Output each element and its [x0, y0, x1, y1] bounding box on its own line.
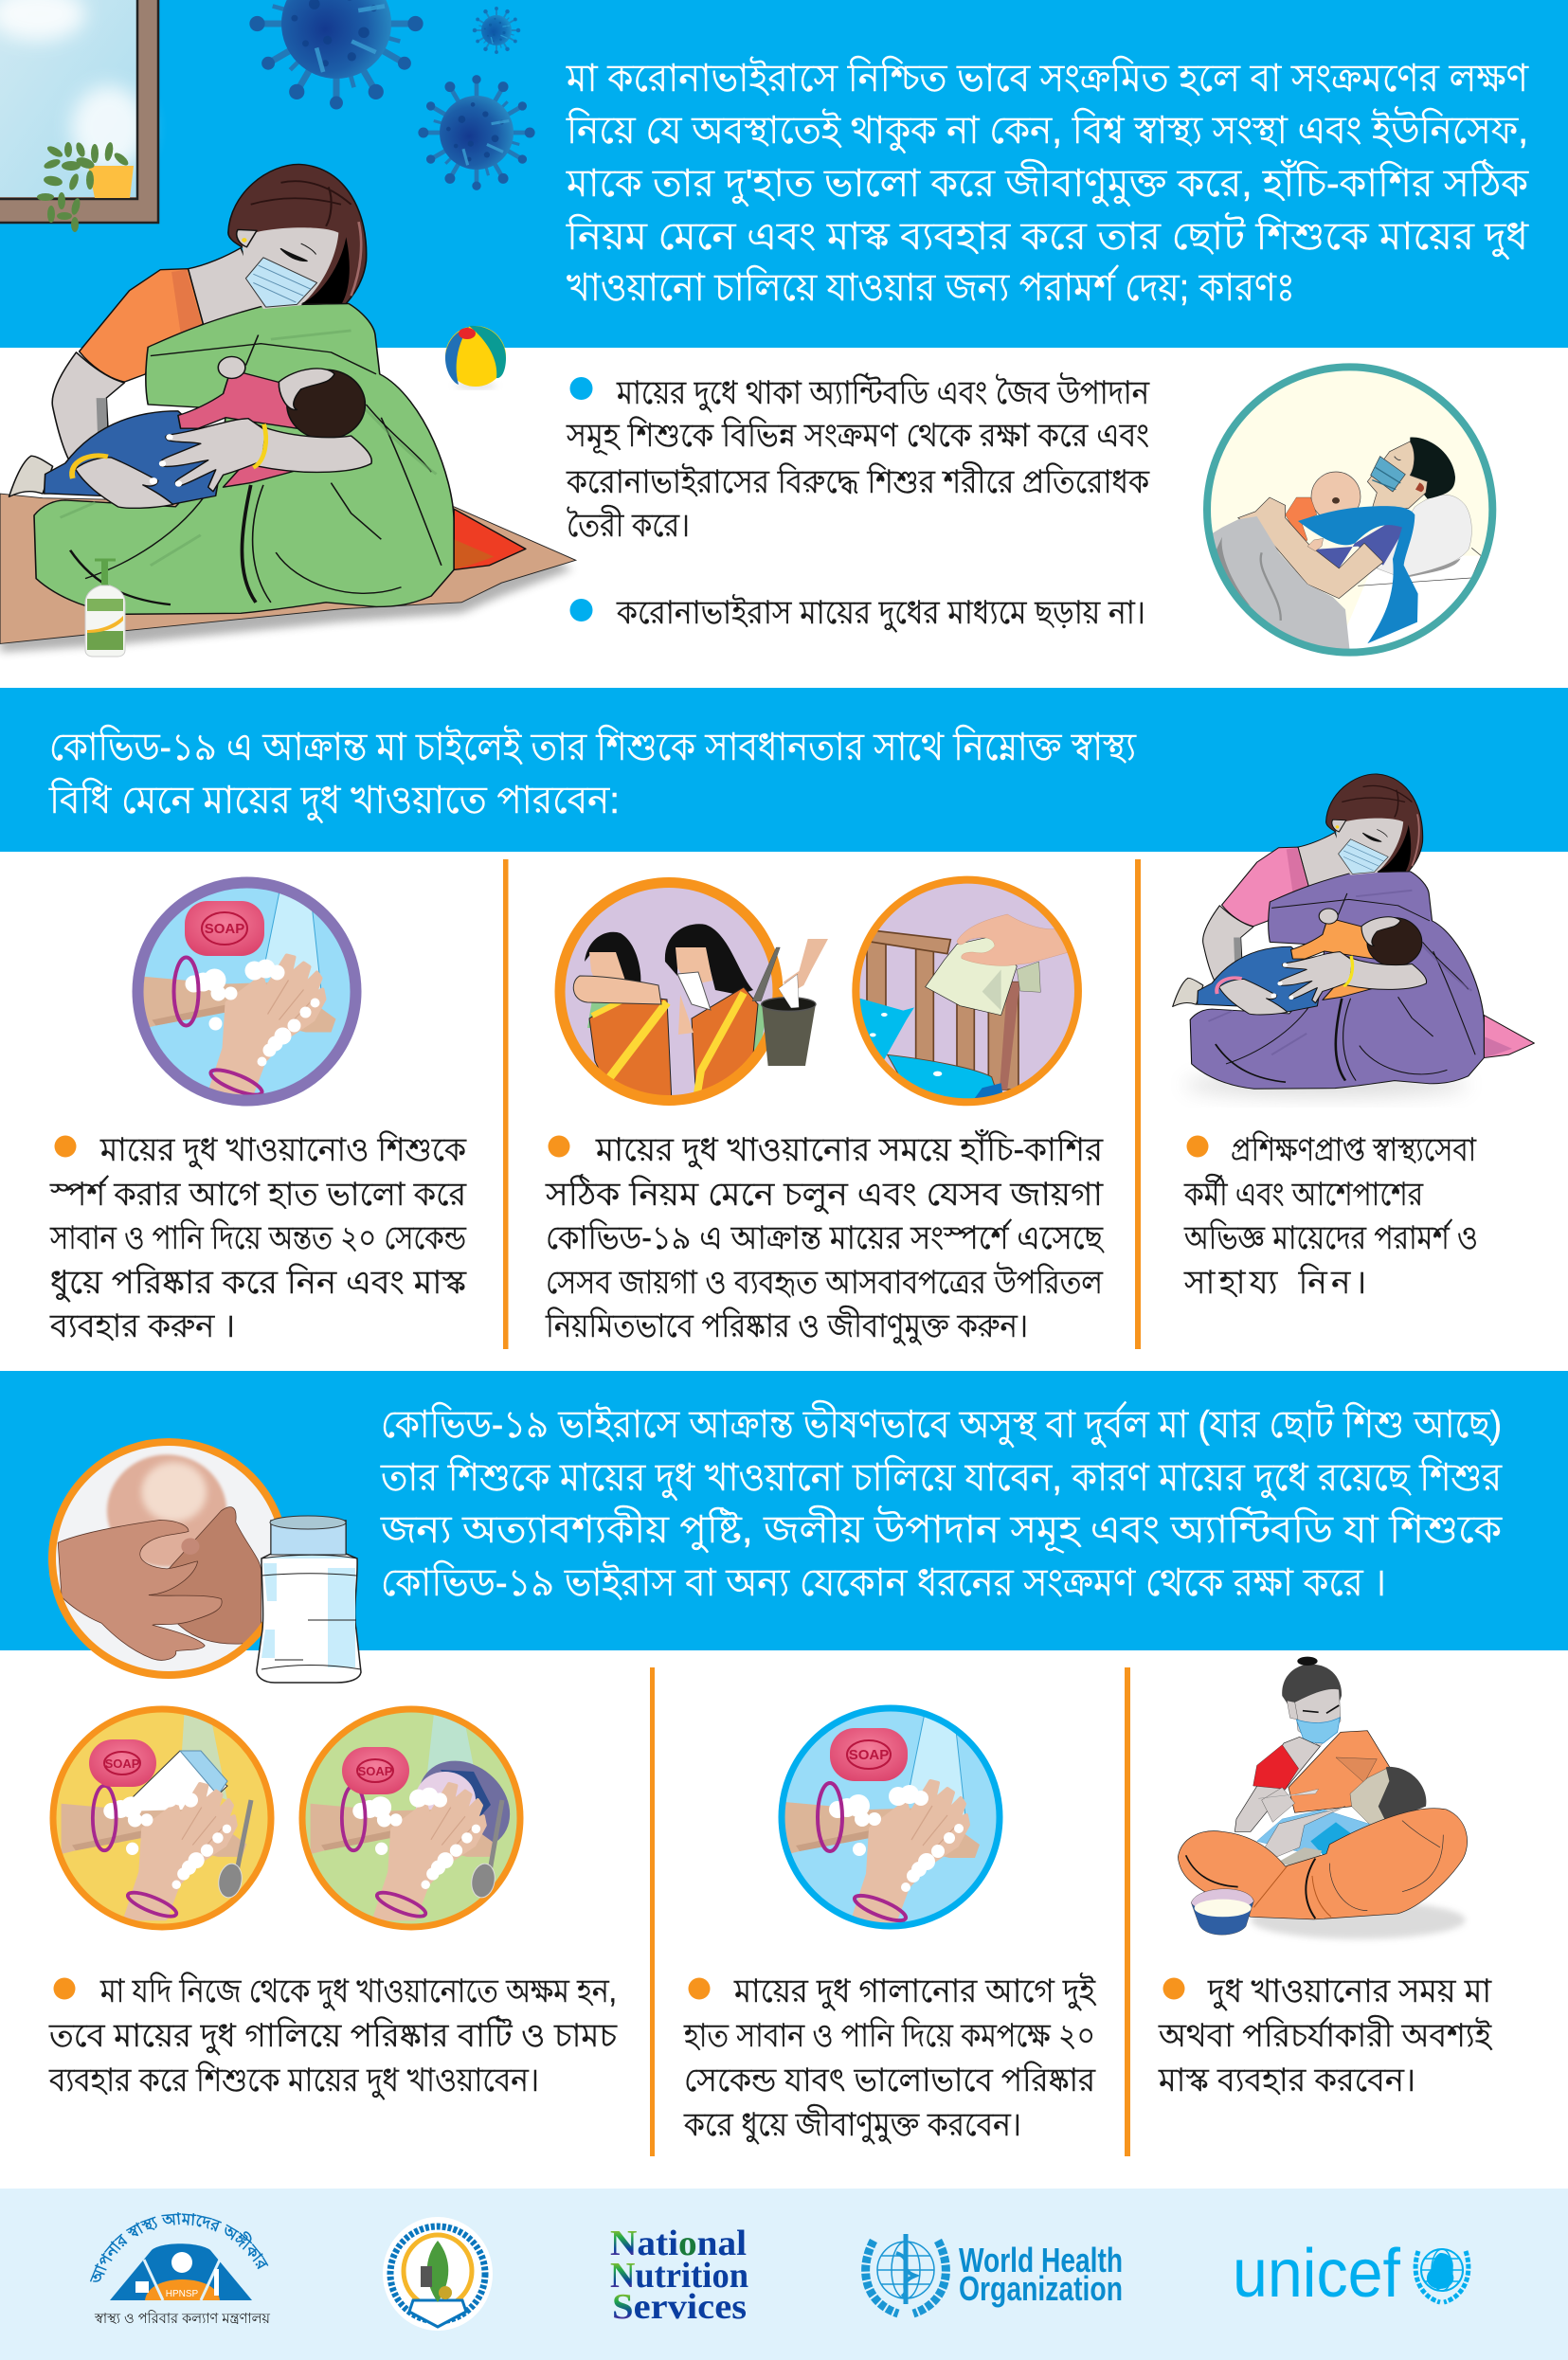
bullet list: why breastfeed — [566, 372, 1150, 632]
icon: soap — [830, 1728, 908, 1781]
background top band — [0, 0, 1568, 348]
text: wear a mask: মাস্ক ব্যবহার করবেন। — [1158, 2063, 1415, 2099]
icon: coronavirus medium — [418, 75, 535, 190]
logo: World Health Organization: World Health — [959, 2241, 1123, 2279]
bullet paragraph one: তৈরী করে। — [567, 505, 690, 544]
illustration: mother in purple sari — [1173, 774, 1534, 1096]
band heading text: বিধি মেনে মায়ের দুধ খাওয়াতে পারবেন: — [48, 778, 620, 823]
logo: National Nutrition Services: Services — [612, 2287, 747, 2327]
bullet — [570, 377, 593, 400]
logo: National Nutrition Services: National — [610, 2224, 747, 2263]
intro text: মাকে তার দু'হাত ভালো করে জীবাণুমুক্ত করে, হাঁচি-কাশির সঠিক — [566, 159, 1529, 207]
text: cough hygiene — [545, 1129, 1105, 1345]
band paragraph — [380, 1400, 1503, 1604]
icon: hand expressing milk — [52, 1442, 285, 1675]
text: wash hands: স্পর্শ করার আগে হাত ভালো করে — [49, 1175, 467, 1213]
logo: national nutrition seal — [383, 2217, 493, 2331]
icon: spoon — [469, 1800, 502, 1900]
text: cough hygiene: মায়ের দুধ খাওয়ানোর সময়ে হাঁচি-কাশির — [595, 1129, 1104, 1169]
band heading text — [48, 725, 1137, 823]
illustration: mother lying with baby — [1206, 367, 1506, 660]
text: cough hygiene: সঠিক নিয়ম মেনে চলুন এবং যেসব জায়গা — [545, 1174, 1104, 1214]
band: severely ill mother — [0, 1371, 1568, 1650]
intro text: নিয়ম মেনে এবং মাস্ক ব্যবহার করে তার ছোট শিশুকে মায়ের দুধ — [566, 212, 1529, 260]
text: wash hands: ধুয়ে পরিষ্কার করে নিন এবং মাস্ক — [50, 1264, 467, 1302]
icon: wiping crib surface — [853, 880, 1078, 1106]
text: cup feeding: ব্যবহার করে শিশুকে মায়ের দুধ খাওয়াবেন। — [48, 2062, 539, 2099]
bullet paragraph one: সমূহ শিশুকে বিভিন্ন সংক্রমণ থেকে রক্ষা করে এবং — [566, 417, 1149, 456]
footer logo strip — [0, 2189, 1568, 2360]
intro text: মা করোনাভাইরাসে নিশ্চিত ভাবে সংক্রমিত হলে বা সংক্রমণের লক্ষণ — [566, 56, 1529, 99]
text: wash before expressing: করে ধুয়ে জীবাণুমুক্ত করবেন। — [683, 2104, 1021, 2144]
band paragraph: কোভিড-১৯ ভাইরাস বা অন্য যেকোন ধরনের সংক্রমণ থেকে রক্ষা করে । — [381, 1560, 1386, 1604]
icon: washing bowl with soap and spoon — [302, 1709, 528, 1927]
text: cup feeding: তবে মায়ের দুধ গালিয়ে পরিষ্কার বাটি ও চামচ — [48, 2015, 618, 2055]
text: seek help: প্রশিক্ষণপ্রাপ্ত স্বাস্থ্যসেবা — [1231, 1131, 1477, 1168]
logo: unicef: unicef — [1233, 2236, 1401, 2312]
icon: soap — [185, 901, 264, 956]
band paragraph: তার শিশুকে মায়ের দুধ খাওয়ানো চালিয়ে যাবেন, কারণ মায়ের দুধে রয়েছে শিশুর — [380, 1455, 1503, 1501]
text: wash before expressing: হাত সাবান ও পানি দিয়ে কমপক্ষে ২০ — [683, 2017, 1095, 2054]
intro text — [566, 56, 1529, 309]
logo: World Health Organization — [866, 2234, 1123, 2314]
text: wear a mask — [1158, 1973, 1492, 2099]
logo: National Nutrition Services: Nutrition — [610, 2256, 748, 2296]
icon: soap: SOAP — [358, 1764, 393, 1778]
icon: waste bin and hand — [752, 939, 828, 1066]
icon: coronavirus small — [473, 7, 520, 54]
icon: coronavirus large — [249, 0, 424, 109]
band paragraph: জন্য অত্যাবশ্যকীয় পুষ্টি, জলীয় উপাদান সমূহ এবং অ্যান্টিবডি যা শিশুকে — [380, 1505, 1503, 1553]
illustration: mother spoon feeding baby — [1178, 1657, 1468, 1939]
text: wash hands: মায়ের দুধ খাওয়ানোও শিশুকে — [99, 1131, 467, 1169]
icon: women covering coughs and sneezes — [560, 883, 828, 1104]
text: wash before expressing: মায়ের দুধ গালানোর আগে দুই — [733, 1973, 1096, 2010]
bullet — [570, 599, 593, 622]
bullet paragraph one — [566, 372, 1150, 544]
logo: World Health Organization: Organization — [959, 2269, 1123, 2308]
text: seek help — [1183, 1131, 1478, 1301]
text: wash hands — [49, 1131, 467, 1344]
section: hygiene steps — [49, 859, 1478, 1349]
text: wash hands: সাবান ও পানি দিয়ে অন্তত ২০ সেকেন্ড — [49, 1219, 467, 1256]
logo: HPNSP ministry — [89, 2212, 271, 2327]
icon: hand washing, blue ring — [782, 1708, 1000, 1926]
intro text: খাওয়ানো চালিয়ে যাওয়ার জন্য পরামর্শ দেয়; কারণঃ — [567, 264, 1295, 309]
logo: HPNSP ministry: HPNSP — [166, 2289, 199, 2299]
icon: hand washing with soap, purple ring — [138, 883, 356, 1101]
text: seek help: সাহায্য নিন। — [1183, 1264, 1366, 1301]
bullet paragraph one: করোনাভাইরাসের বিরুদ্ধে শিশুর শরীরে প্রতিরোধক — [566, 461, 1150, 500]
icon: soap: SOAP — [205, 921, 244, 937]
illustration: mother on mat in green sari — [0, 164, 576, 657]
icon: potted plant — [37, 141, 134, 232]
icon: soap: SOAP — [849, 1747, 889, 1763]
text: wash hands: ব্যবহার করুন । — [49, 1308, 235, 1344]
logo: HPNSP ministry: স্বাস্থ্য ও পরিবার কল্যাণ মন্ত্রণালয় — [94, 2310, 271, 2327]
window with plant — [0, 0, 158, 232]
text: cough hygiene: সেসব জায়গা ও ব্যবহৃত আসবাবপত্রের উপরিতল — [546, 1262, 1104, 1301]
icon: soap — [89, 1739, 156, 1787]
icon: beach ball — [445, 326, 506, 388]
text: cough hygiene: কোভিড-১৯ এ আক্রান্ত মায়ের সংস্পর্শে এসেছে — [546, 1218, 1105, 1256]
icon: glass jar — [257, 1516, 361, 1683]
text: cup feeding: মা যদি নিজে থেকে দুধ খাওয়ানোতে অক্ষম হন, — [99, 1973, 617, 2010]
logo: National Nutrition Services — [610, 2224, 748, 2327]
text: cough hygiene: নিয়মিতভাবে পরিষ্কার ও জীবাণুমুক্ত করুন। — [545, 1306, 1028, 1345]
text: wear a mask: দুধ খাওয়ানোর সময় মা — [1207, 1973, 1492, 2010]
logo: HPNSP ministry: আপনার স্বাস্থ্য আমাদের অঙ্গীকার — [89, 2212, 269, 2282]
band paragraph: কোভিড-১৯ ভাইরাসে আক্রান্ত ভীষণভাবে অসুস্থ বা দুর্বল মা (যার ছোট শিশু আছে) — [381, 1400, 1502, 1448]
icon: hand sanitizer bottle — [85, 560, 125, 657]
text: seek help: কর্মী এবং আশেপাশের — [1183, 1174, 1424, 1213]
icon: soap: SOAP — [105, 1756, 140, 1771]
band: who can breastfeed — [0, 688, 1568, 852]
icon: spoon — [216, 1800, 251, 1900]
icon: bowl of milk — [1191, 1889, 1253, 1935]
text: cup feeding — [48, 1973, 618, 2099]
icon: soap — [342, 1747, 409, 1794]
text: wear a mask: অথবা পরিচর্যাকারী অবশ্যই — [1158, 2015, 1492, 2054]
section: expressing and feeding — [48, 1657, 1492, 2156]
bullet paragraph two: করোনাভাইরাস মায়ের দুধের মাধ্যমে ছড়ায় না। — [616, 594, 1145, 632]
text: wash before expressing — [683, 1973, 1096, 2144]
band heading text: কোভিড-১৯ এ আক্রান্ত মা চাইলেই তার শিশুকে সাবধানতার সাথে নিম্নোক্ত স্বাস্থ্য — [49, 725, 1137, 768]
bullet paragraph one: মায়ের দুধে থাকা অ্যান্টিবডি এবং জৈব উপাদান — [616, 372, 1150, 412]
intro text: নিয়ে যে অবস্থাতেই থাকুক না কেন, বিশ্ব স্বাস্থ্য সংস্থা এবং ইউনিসেফ, — [566, 106, 1528, 153]
icon: washing jar with soap and spoon — [53, 1705, 271, 1927]
text: wash before expressing: সেকেন্ড যাবৎ ভালোভাবে পরিষ্কার — [684, 2062, 1096, 2099]
text: seek help: অভিজ্ঞ মায়েদের পরামর্শ ও — [1183, 1218, 1478, 1256]
